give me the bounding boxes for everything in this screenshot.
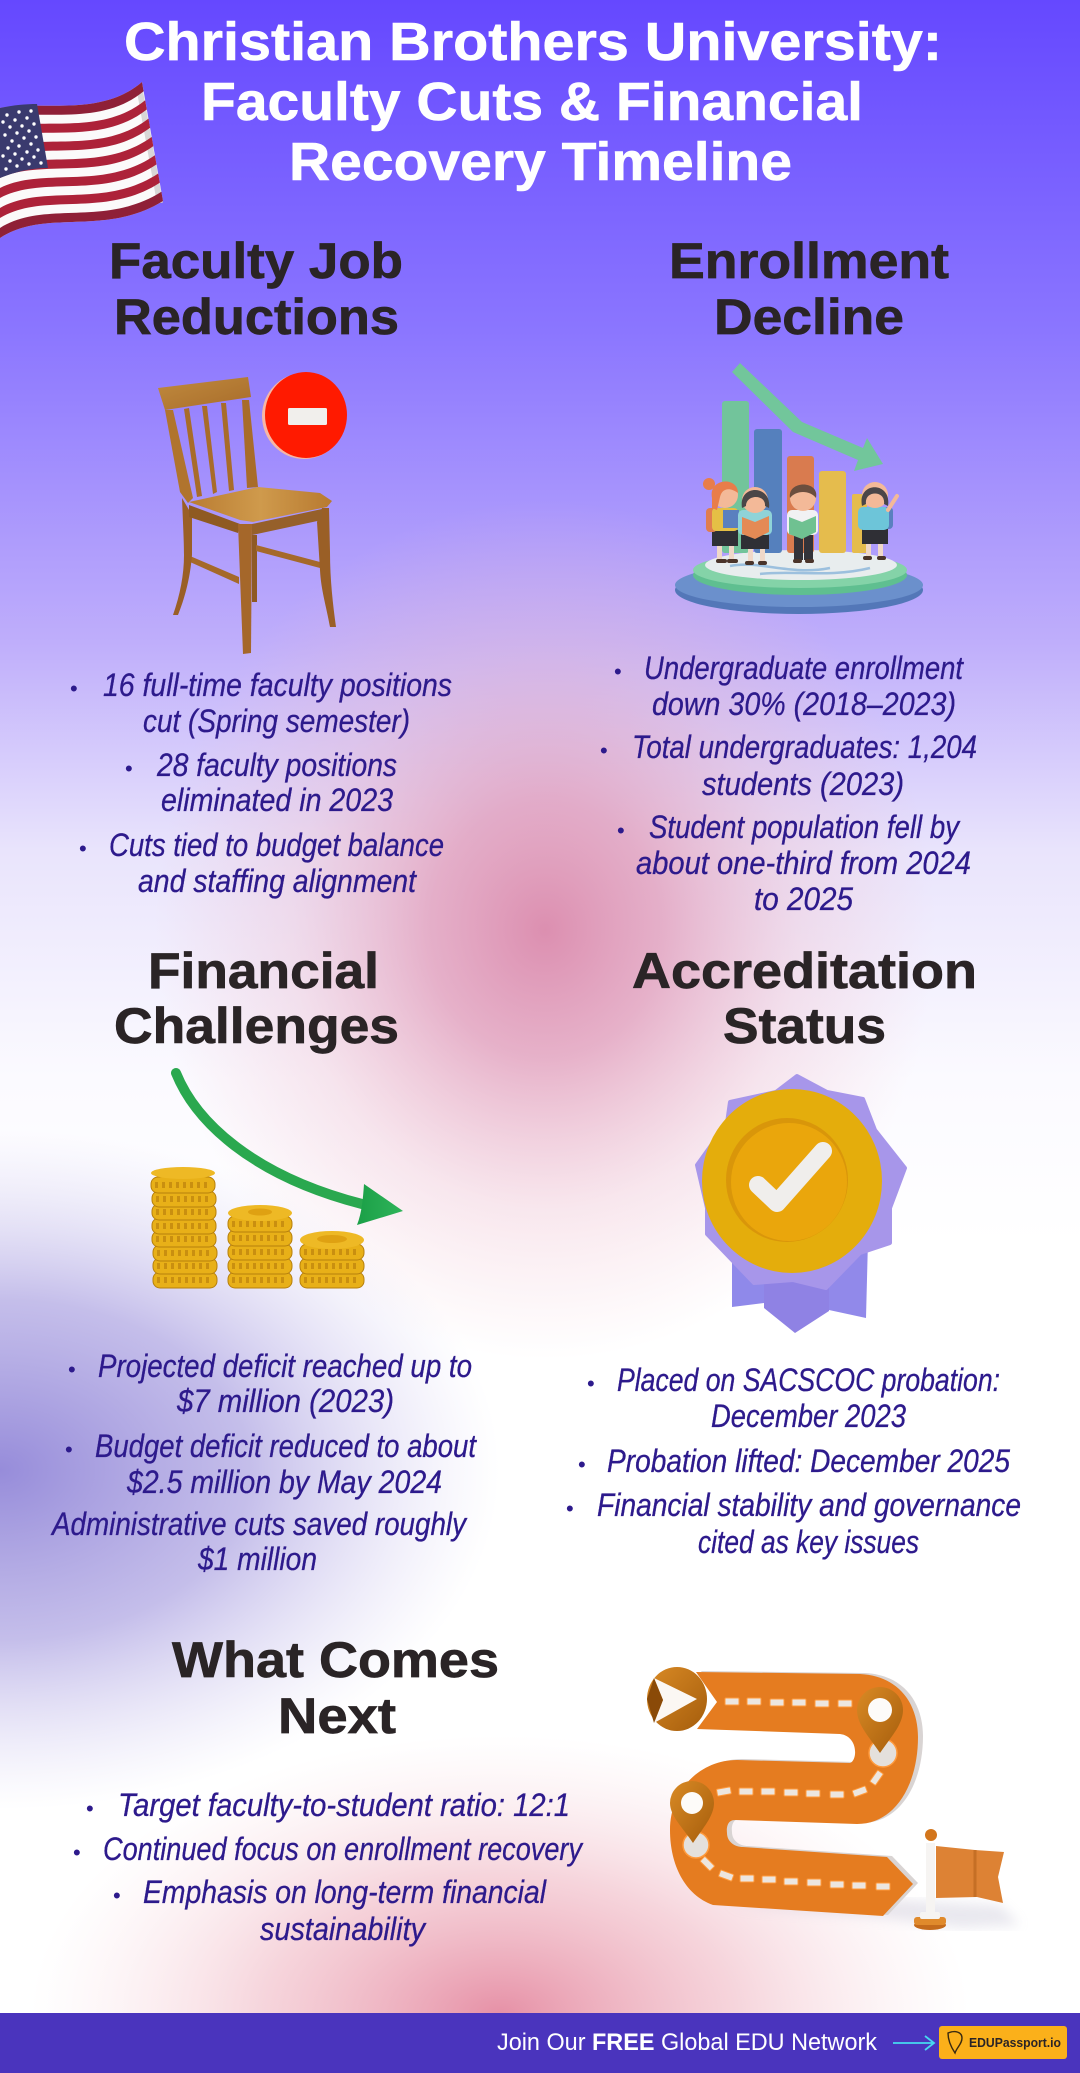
text block: enrollment bullets: Total undergraduates: 1,204 bbox=[632, 729, 977, 765]
text block: faculty bullets: • bbox=[70, 676, 78, 701]
text block: enrollment bullets: down 30% (2018–2023) bbox=[652, 686, 956, 722]
text block: financial bullets: $2.5 million by May 2024 bbox=[126, 1464, 442, 1500]
footer bar bbox=[0, 2013, 1080, 2073]
text block: next steps bullets: Emphasis on long-term financial bbox=[143, 1874, 547, 1910]
text block: faculty bullets: Cuts tied to budget balance bbox=[109, 827, 444, 863]
text block: enrollment bullets: students (2023) bbox=[702, 766, 904, 802]
text block: enrollment bullets: • bbox=[600, 738, 608, 763]
text block: enrollment bullets bbox=[600, 650, 977, 917]
heading: what comes next: What Comes bbox=[172, 1632, 499, 1688]
text block: accreditation bullets: • bbox=[566, 1496, 574, 1521]
heading: accreditation status: Accreditation bbox=[632, 943, 977, 999]
text block: enrollment bullets: • bbox=[617, 818, 625, 843]
text block: financial bullets: Administrative cuts saved roughly bbox=[50, 1506, 468, 1542]
footer call to action: Join Our FREE Global EDU Network bbox=[497, 2029, 878, 2056]
heading: financial challenges: Financial bbox=[148, 943, 379, 999]
text block: financial bullets: • bbox=[68, 1357, 76, 1382]
title: Recovery Timeline bbox=[289, 132, 792, 192]
text block: faculty bullets: 28 faculty positions bbox=[156, 747, 397, 783]
heading: enrollment decline: Enrollment bbox=[669, 233, 949, 289]
logo badge: EDUPassport.io: EDUPassport.io bbox=[969, 2035, 1061, 2050]
text block: next steps bullets bbox=[73, 1787, 584, 1947]
panel: what comes next bbox=[73, 1632, 1020, 1947]
heading: financial challenges bbox=[114, 943, 399, 1054]
heading: faculty job reductions: Reductions bbox=[114, 289, 399, 345]
text block: accreditation bullets: • bbox=[587, 1371, 595, 1396]
panel: faculty job reductions bbox=[70, 233, 452, 899]
text block: faculty bullets: eliminated in 2023 bbox=[161, 782, 393, 818]
text block: faculty bullets bbox=[70, 667, 452, 899]
title: Christian Brothers University: bbox=[124, 12, 942, 72]
heading: faculty job reductions bbox=[109, 233, 403, 345]
panel: accreditation status bbox=[566, 943, 1021, 1560]
text block: next steps bullets: Continued focus on enrollment recovery bbox=[103, 1831, 584, 1867]
heading: faculty job reductions: Faculty Job bbox=[109, 233, 403, 289]
text block: enrollment bullets: Undergraduate enrollment bbox=[644, 650, 964, 686]
text block: next steps bullets: Target faculty-to-student ratio: 12:1 bbox=[118, 1787, 570, 1823]
text block: financial bullets: Projected deficit reached up to bbox=[98, 1348, 472, 1384]
text block: enrollment bullets: to 2025 bbox=[754, 881, 853, 917]
heading: what comes next bbox=[172, 1632, 499, 1744]
text block: faculty bullets: 16 full-time faculty positions bbox=[103, 667, 452, 703]
panel: financial challenges bbox=[50, 943, 477, 1577]
title bbox=[124, 12, 942, 192]
text block: faculty bullets: • bbox=[79, 836, 87, 861]
icon: winding orange road with pins and flag bbox=[647, 1667, 1020, 1930]
text block: faculty bullets: cut (Spring semester) bbox=[143, 703, 410, 739]
text block: accreditation bullets: Probation lifted: December 2025 bbox=[607, 1443, 1010, 1479]
heading: enrollment decline bbox=[669, 233, 949, 345]
icon: gold check medal on purple rosette bbox=[697, 1076, 905, 1333]
text block: financial bullets: • bbox=[65, 1437, 73, 1462]
icon: falling bar chart with students bbox=[675, 363, 923, 614]
logo badge: EDUPassport.io bbox=[939, 2026, 1067, 2059]
text block: next steps bullets: • bbox=[73, 1840, 81, 1865]
text block: accreditation bullets: cited as key issues bbox=[698, 1524, 919, 1560]
icon: US flag bbox=[0, 82, 163, 238]
title: Faculty Cuts & Financial bbox=[201, 72, 863, 132]
text block: accreditation bullets: Financial stability and governance bbox=[597, 1487, 1021, 1523]
heading: what comes next: Next bbox=[278, 1688, 396, 1744]
text block: financial bullets: $1 million bbox=[197, 1541, 317, 1577]
icon: falling arrow over coin stacks bbox=[151, 1073, 403, 1288]
text block: next steps bullets: • bbox=[113, 1883, 121, 1908]
heading: financial challenges: Challenges bbox=[114, 998, 399, 1054]
heading: accreditation status bbox=[632, 943, 977, 1054]
heading: accreditation status: Status bbox=[723, 998, 886, 1054]
text block: enrollment bullets: about one-third from 2024 bbox=[636, 845, 971, 881]
text block: financial bullets: Budget deficit reduced to about bbox=[95, 1428, 477, 1464]
text block: enrollment bullets: Student population fell by bbox=[649, 809, 961, 845]
text block: accreditation bullets: December 2023 bbox=[711, 1398, 906, 1434]
text block: accreditation bullets: Placed on SACSCOC probation: bbox=[617, 1362, 1000, 1398]
text block: enrollment bullets: • bbox=[614, 659, 622, 684]
panel: enrollment decline bbox=[600, 233, 977, 917]
text block: accreditation bullets bbox=[566, 1362, 1021, 1560]
text block: next steps bullets: • bbox=[86, 1796, 94, 1821]
text block: financial bullets bbox=[50, 1348, 477, 1577]
text block: next steps bullets: sustainability bbox=[260, 1911, 427, 1947]
text block: accreditation bullets: • bbox=[578, 1452, 586, 1477]
text block: financial bullets: $7 million (2023) bbox=[176, 1383, 394, 1419]
icon: wooden chair with minus badge bbox=[158, 372, 347, 654]
text block: faculty bullets: and staffing alignment bbox=[138, 863, 417, 899]
heading: enrollment decline: Decline bbox=[714, 289, 904, 345]
text block: faculty bullets: • bbox=[125, 756, 133, 781]
arrow to logo bbox=[893, 2036, 934, 2050]
